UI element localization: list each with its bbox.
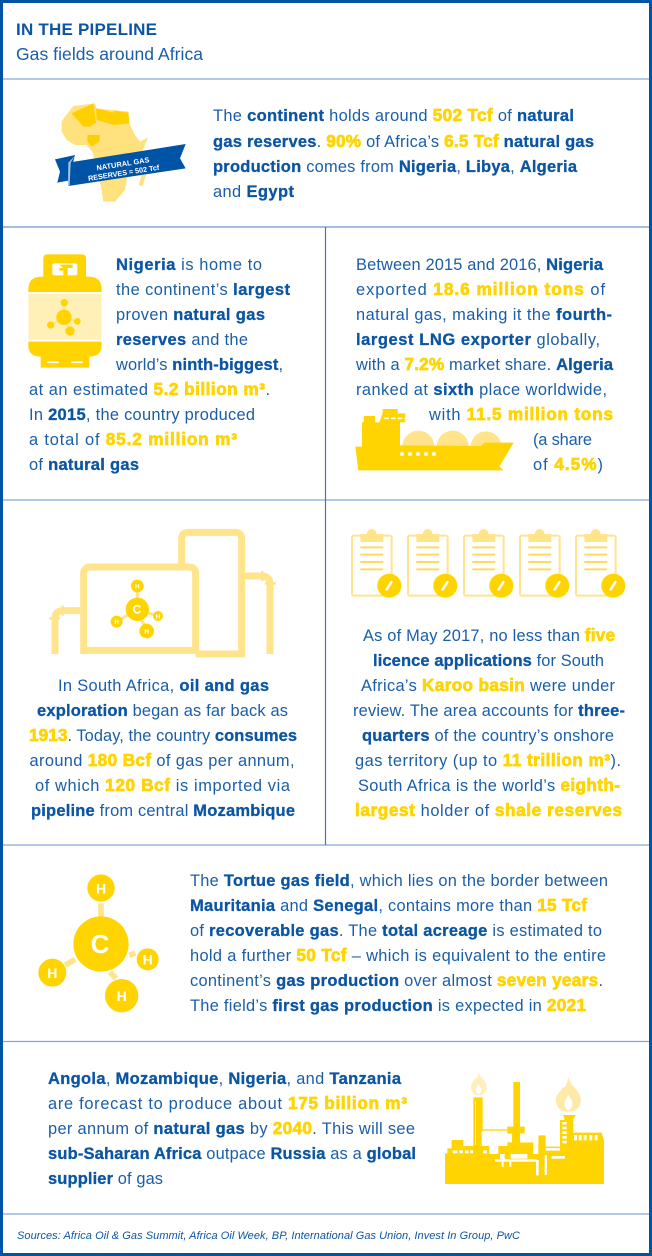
text: Nigeria reserves: of natural gas [29,456,139,474]
text: Karoo basin: Africa’s Karoo basin were under [361,675,616,695]
icon: Africa map with ribbon [55,103,186,202]
text: Nigeria reserves: Nigeria is home to [116,256,262,274]
text: South Africa exploration [29,677,297,820]
panel: sub-Saharan forecast [48,1070,604,1188]
text: continent reserves [213,105,594,201]
icon: methane molecule: C [91,929,110,959]
title: Gas fields around Africa [16,44,203,64]
text: LNG exports: with 11.5 million tons [428,404,613,424]
text: Nigeria reserves: the continent’s largest [116,281,290,299]
text: Karoo basin: As of May 2017, no less than five [363,625,615,645]
panel: South Africa exploration [29,532,297,820]
text: Nigeria reserves: proven natural gas [116,306,265,324]
icon: storage tanks and pipes: C [133,603,142,617]
panel: continent overview [55,103,594,202]
text: continent reserves: and Egypt [213,183,294,201]
panel: Karoo basin [352,529,625,820]
text: LNG exports [355,256,614,474]
text: sub-Saharan forecast: sub-Saharan Africa outpace Russia as a global [48,1145,416,1163]
text: Karoo basin: review. The area accounts for three- [353,702,625,720]
icon: Africa map with ribbon: NATURAL GAS [96,155,150,172]
text: South Africa exploration: pipeline from central Mozambique [31,802,295,820]
icon: methane molecule: H [143,951,153,967]
text: continent reserves: gas reserves. 90% of Africa’s 6.5 Tcf natural gas [213,131,594,151]
text: LNG exports: exported 18.6 million tons of [356,279,605,299]
text: Tortue gas field: of recoverable gas. The total acreage is estimated to [190,922,602,940]
text: Karoo basin: licence applications for South [373,652,604,670]
title [16,20,203,64]
icon: storage tanks and pipes [49,532,276,654]
text: Tortue gas field: hold a further 50 Tcf – which is equivalent to the entire [190,945,606,965]
text: continent reserves: The continent holds around 502 Tcf of natural [213,105,574,125]
text: LNG exports: (a share [533,431,592,449]
text: sub-Saharan forecast: supplier of gas [48,1170,163,1188]
text: South Africa exploration: exploration began as far back as [37,702,288,720]
icon: storage tanks and pipes: H [135,583,140,590]
icon: gas cylinder [28,254,102,368]
text: Nigeria reserves: In 2015, the country produced [29,406,255,424]
text: LNG exports: natural gas, making it the fourth- [356,306,612,324]
icon: methane molecule [38,874,159,1012]
text: LNG exports: with a 7.2% market share. Algeria [355,354,614,374]
icon: storage tanks and pipes: H [144,629,149,636]
panel: LNG exports [355,256,614,474]
icon: five licence clipboards [352,529,625,598]
text: Tortue gas field: The Tortue gas field, which lies on the border between [190,872,608,890]
text: Nigeria reserves [29,256,290,474]
text: Karoo basin [353,625,625,820]
text: Nigeria reserves: world’s ninth-biggest, [115,356,283,374]
text: Karoo basin: largest holder of shale reserves [355,800,622,820]
panel: Tortue gas field [38,872,608,1015]
icon: methane molecule: H [47,965,57,981]
text: sub-Saharan forecast [48,1070,416,1188]
text: South Africa exploration: of which 120 Bcf is imported via [35,775,291,795]
text: Nigeria reserves: at an estimated 5.2 billion m³. [29,379,270,399]
icon: methane molecule: H [96,880,106,896]
text: Nigeria reserves: a total of 85.2 million m³ [29,429,237,449]
text: South Africa exploration: around 180 Bcf of gas per annum, [30,750,294,770]
text: sub-Saharan forecast: are forecast to produce about 175 billion m³ [48,1093,407,1113]
text: sub-Saharan forecast: per annum of natural gas by 2040. This will see [48,1118,415,1138]
icon: methane molecule: H [117,988,127,1004]
text: sub-Saharan forecast: Angola, Mozambique, Nigeria, and Tanzania [48,1070,402,1088]
panel: Nigeria reserves [28,254,291,474]
text: LNG exports: Between 2015 and 2016, Nigeria [356,256,604,274]
text: Karoo basin: quarters of the country’s onshore [362,727,614,745]
text: Tortue gas field: continent’s gas production over almost seven years. [190,970,603,990]
text: continent reserves: production comes from Nigeria, Libya, Algeria [213,158,578,176]
icon: refinery [445,1072,604,1184]
text: Karoo basin: South Africa is the world’s eighth- [358,775,620,795]
text: Nigeria reserves: reserves and the [116,331,248,349]
text: South Africa exploration: 1913. Today, the country consumes [29,725,297,745]
text: LNG exports: largest LNG exporter globally, [356,331,600,349]
text: South Africa exploration: In South Africa, oil and gas [58,677,269,695]
text: Tortue gas field: Mauritania and Senegal, contains more than 15 Tcf [190,895,587,915]
icon: LNG tanker [355,409,514,470]
text: Tortue gas field: The field’s first gas production is expected in 2021 [190,995,586,1015]
icon: storage tanks and pipes: H [114,619,119,626]
text: Karoo basin: gas territory (up to 11 trillion m³). [355,750,621,770]
icon: Africa map with ribbon: RESERVES = 502 Tcf [87,163,160,183]
text: Tortue gas field [190,872,608,1015]
text: LNG exports: of 4.5%) [533,454,603,474]
title: IN THE PIPELINE [16,20,157,39]
sources: Sources: Africa Oil & Gas Summit, Africa Oil Week, BP, International Gas Union, Invest In Group, PwC [17,1230,520,1242]
text: LNG exports: ranked at sixth place worldwide, [356,381,607,399]
icon: storage tanks and pipes: H [156,613,161,620]
